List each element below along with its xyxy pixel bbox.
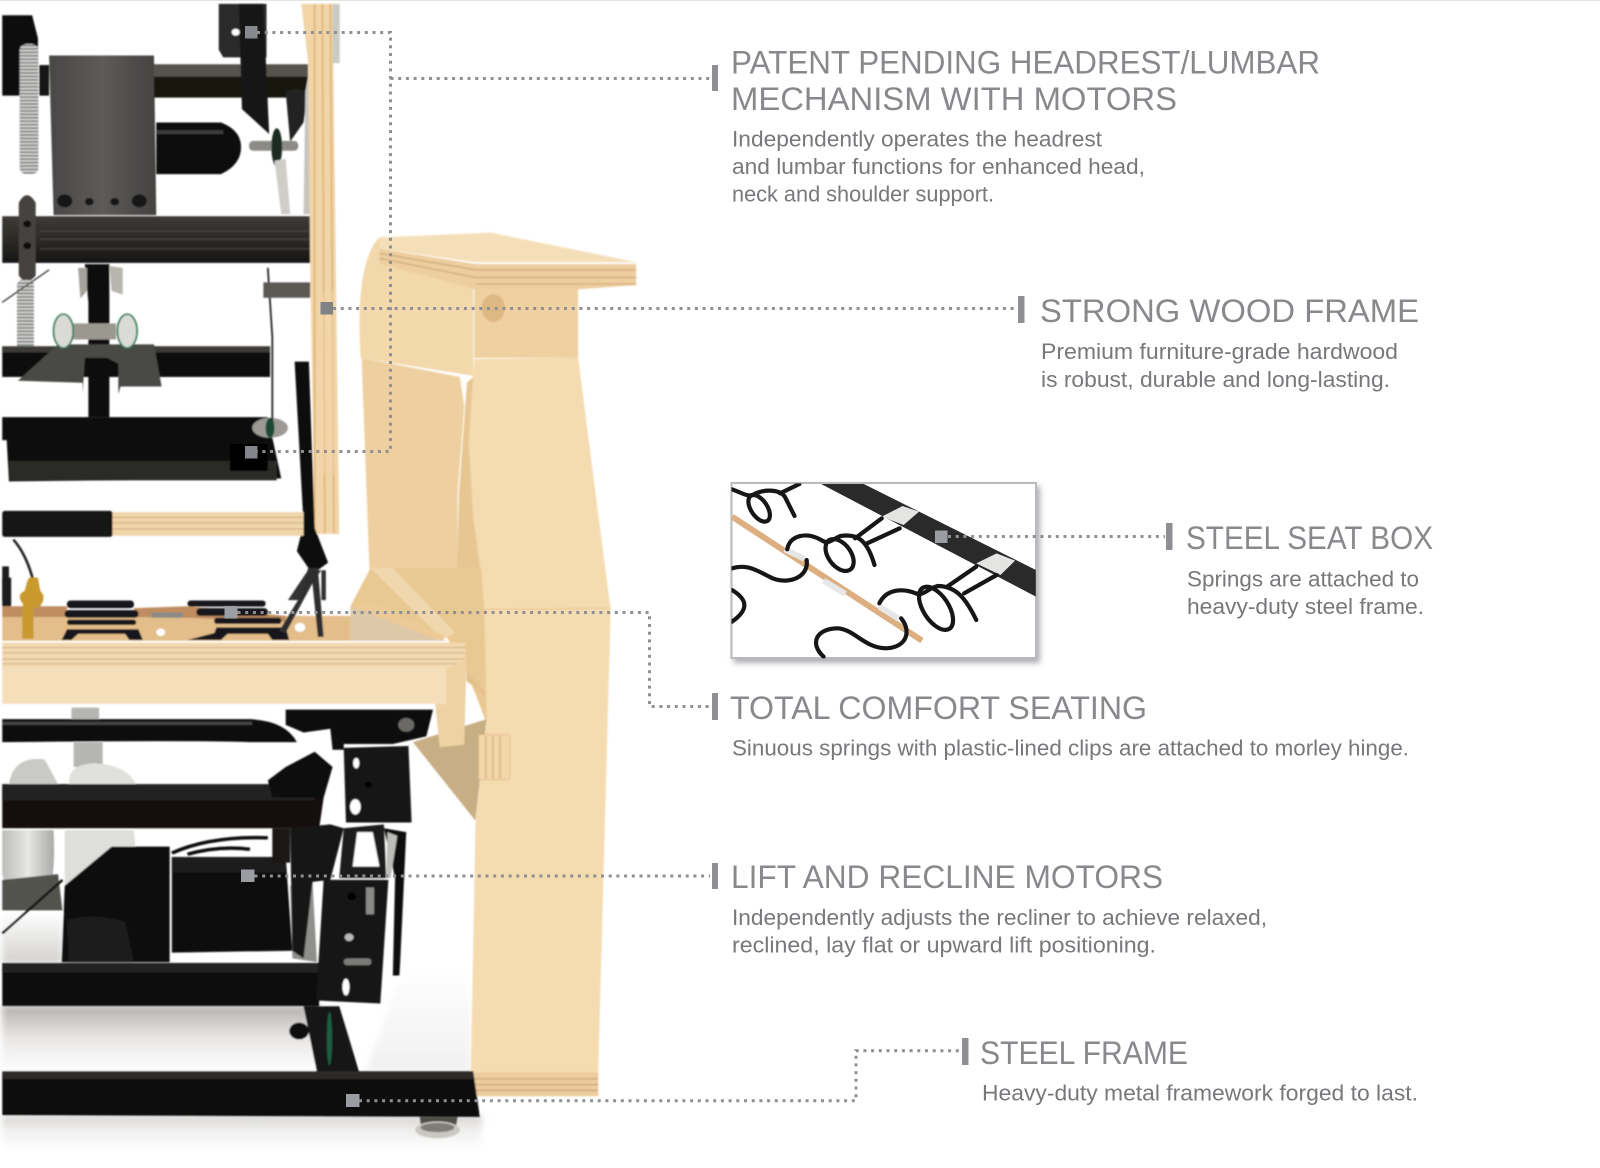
wooden rod — [732, 517, 922, 641]
angle bracket — [263, 282, 310, 298]
upper side plate — [344, 746, 412, 822]
rail clips — [882, 506, 919, 525]
gear segment — [268, 752, 333, 798]
heading: patent pending: MECHANISM WITH MOTORS — [731, 81, 1177, 117]
triangular gusset — [413, 719, 487, 821]
cable and fitting — [13, 540, 33, 582]
leader: lift and recline motors — [241, 870, 710, 882]
top bracket — [219, 4, 267, 57]
photo: chair frame — [2, 4, 636, 1150]
top recliner bracket — [286, 710, 433, 750]
scissor leg — [304, 1006, 359, 1072]
tension spring upper — [20, 44, 38, 174]
yellow fitting — [20, 578, 44, 639]
outer leg — [471, 568, 611, 1096]
upper crossbar — [154, 64, 308, 77]
lower arm panel — [362, 358, 464, 600]
lower crossbar — [2, 963, 319, 1006]
cable — [268, 268, 272, 421]
lower crossbar — [2, 417, 281, 481]
callout: steel seat box: Springs are attached to — [1187, 566, 1419, 592]
lower side plate — [316, 880, 388, 1004]
mid crossbar — [2, 784, 324, 828]
callout: lift and recline motors: Independently adjusts the recliner to achieve relaxed, — [732, 905, 1267, 930]
seat rail face — [2, 668, 449, 704]
tension spring lower — [17, 279, 34, 369]
base steel frame — [2, 1071, 480, 1117]
callout: steel frame: Heavy-duty metal framework forged to last. — [982, 1080, 1418, 1106]
callout: total comfort seating: Sinuous springs with plastic-lined clips are attached to morley hinge. — [732, 736, 1409, 760]
armrest ply edge — [379, 249, 636, 289]
seat rail ply top — [2, 643, 466, 668]
seat rail end — [435, 660, 466, 747]
diagonal brace — [371, 568, 455, 639]
heading: lift and recline motors: LIFT AND RECLINE MOTORS — [731, 859, 1163, 895]
lift motor cylinder — [172, 857, 292, 953]
callout: steel frame — [962, 1035, 1418, 1106]
callout: headrest/lumbar mechanism: neck and shoulder support. — [732, 182, 994, 206]
webbing rail — [2, 606, 286, 622]
plate bolts — [57, 194, 147, 207]
plywood back post — [301, 4, 339, 534]
rear left bracket — [2, 15, 38, 96]
callout: headrest/lumbar mechanism: Independently operates the headrest — [732, 126, 1102, 152]
sinuous springs — [732, 484, 997, 657]
callout: strong wood frame: Premium furniture-grade hardwood — [1041, 339, 1398, 364]
callout: strong wood frame — [1018, 293, 1419, 392]
heading: steel frame: STEEL FRAME — [980, 1035, 1188, 1071]
heading: steel seat box: STEEL SEAT BOX — [1186, 520, 1433, 556]
seat deck board — [2, 616, 350, 641]
steel rail — [821, 484, 1036, 597]
lift motor body — [62, 847, 170, 962]
callout: headrest/lumbar mechanism: and lumbar functions for enhanced head, — [732, 154, 1145, 179]
curved tube — [2, 719, 297, 742]
pivot hardware — [249, 61, 311, 214]
silver disc — [290, 882, 317, 962]
gas spring rod — [279, 568, 324, 637]
gas spring — [295, 362, 328, 574]
callout: headrest/lumbar mechanism — [712, 44, 1320, 206]
leader: total comfort seating — [224, 606, 710, 706]
rear post — [272, 828, 290, 863]
inner panel sliver — [456, 377, 484, 600]
callout: steel seat box — [1166, 520, 1433, 619]
leader: headrest and lumbar — [245, 26, 710, 458]
callout: steel seat box: heavy-duty steel frame. — [1187, 594, 1424, 619]
heading: strong wood frame: STRONG WOOD FRAME — [1040, 293, 1419, 329]
seat, leg and lift mechanism — [2, 568, 611, 1150]
adjustable foot — [415, 1117, 460, 1138]
upper mechanism: headrest and lumbar — [2, 4, 340, 600]
link plates on spring — [19, 195, 36, 281]
seat side brace top — [371, 555, 464, 600]
outer leg front — [469, 358, 609, 600]
callout: lift and recline motors: reclined, lay flat or upward lift positioning. — [732, 932, 1156, 958]
heading: patent pending: PATENT PENDING HEADREST/LUMBAR — [731, 44, 1320, 80]
cable bundle — [172, 838, 268, 854]
foam sleeve — [2, 511, 112, 537]
armrest top — [379, 233, 636, 262]
arm backing panel — [350, 568, 489, 729]
top edge line — [0, 0, 1600, 1]
leader: wood frame — [320, 302, 1016, 314]
coil springs — [62, 601, 289, 640]
callout: lift and recline motors — [712, 859, 1267, 958]
centre post and rollers — [85, 264, 109, 417]
callout: strong wood frame: is robust, durable and long-lasting. — [1041, 367, 1390, 392]
steel clip on post — [333, 4, 340, 63]
gray tank — [69, 763, 136, 784]
drop shadows on floor — [2, 912, 482, 1150]
inset frame — [732, 483, 1036, 658]
recliner links — [290, 824, 406, 976]
headrest motor plate — [49, 55, 156, 215]
support block — [474, 288, 578, 358]
callout: total comfort seating — [712, 690, 1409, 760]
motor cylinder — [156, 122, 241, 174]
leader: steel seat box — [935, 530, 1165, 543]
curved arm panel — [359, 237, 473, 376]
gray post — [71, 708, 103, 767]
wood arm assembly upper — [359, 233, 636, 600]
plywood cross rail — [112, 512, 304, 536]
heading: total comfort seating: TOTAL COMFORT SEATING — [730, 690, 1147, 726]
main beam — [2, 216, 310, 263]
inset photo: springs on steel seat box — [732, 483, 1036, 658]
wood dowel block — [479, 734, 510, 780]
leader: steel frame — [346, 1051, 960, 1107]
